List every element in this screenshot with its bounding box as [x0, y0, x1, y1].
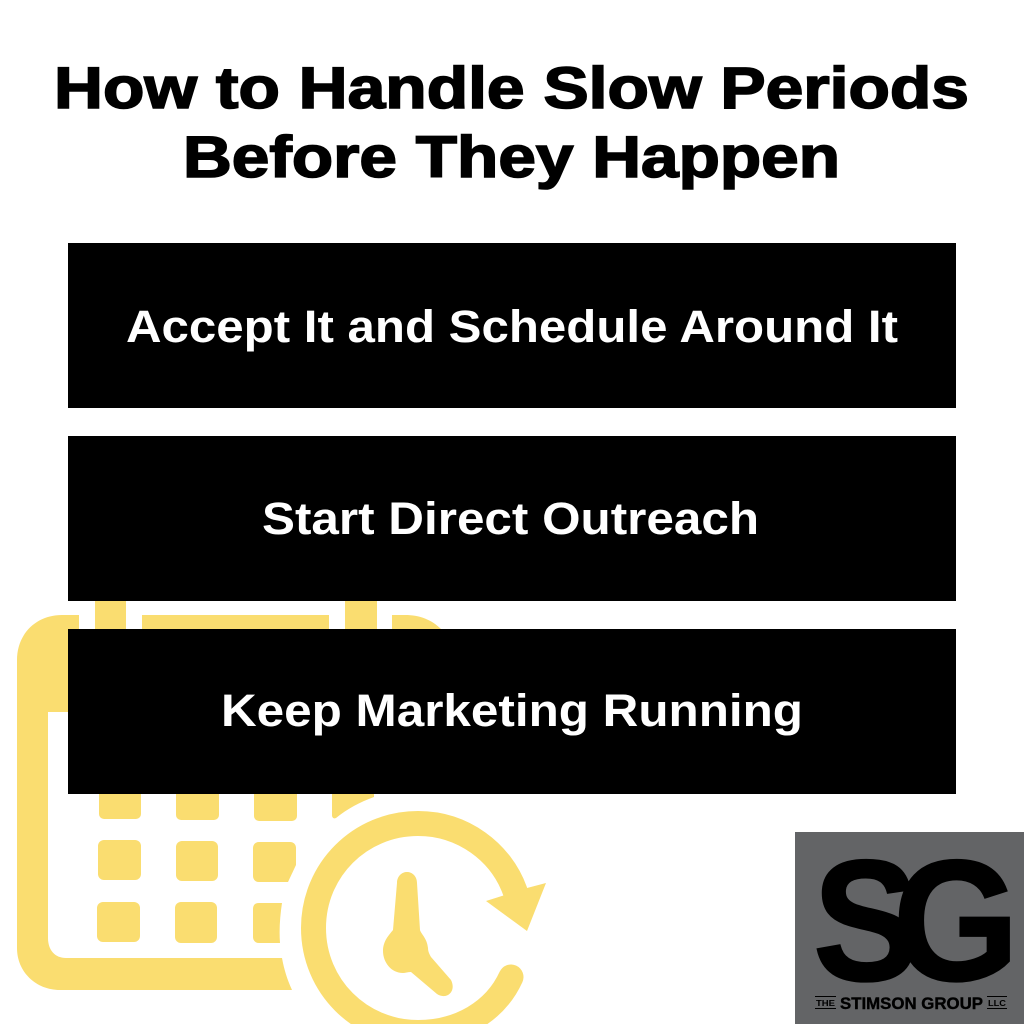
calendar binding pegs [95, 600, 377, 640]
clock arrow ring [314, 824, 515, 1024]
panel: accept it: Accept It and Schedule Around It [126, 301, 898, 352]
logo wordmark: LLC [988, 999, 1006, 1008]
logo wordmark: STIMSON GROUP [840, 994, 983, 1013]
panel: keep marketing: Keep Marketing Running [221, 685, 803, 736]
clock arrow head [486, 883, 546, 931]
logo monogram [813, 825, 1019, 1017]
clock hands [383, 872, 453, 996]
logo wordmark: THE [816, 999, 836, 1008]
panel: direct outreach: Start Direct Outreach [262, 493, 759, 544]
logo: The Stimson Group [795, 825, 1024, 1024]
panel: keep marketing [68, 629, 956, 794]
logo monogram: S [813, 825, 919, 1017]
title line 2: Before They Happen [183, 125, 840, 190]
title [54, 56, 969, 190]
title line 1: How to Handle Slow Periods [54, 56, 969, 121]
panel: accept it [68, 243, 956, 408]
calendar date grid [97, 780, 374, 943]
calendar frame [17, 615, 292, 990]
panel: direct outreach [68, 436, 956, 601]
icon: calendar with clock [17, 600, 546, 1024]
logo monogram: G [893, 825, 1019, 1017]
calendar top bar [142, 615, 441, 640]
